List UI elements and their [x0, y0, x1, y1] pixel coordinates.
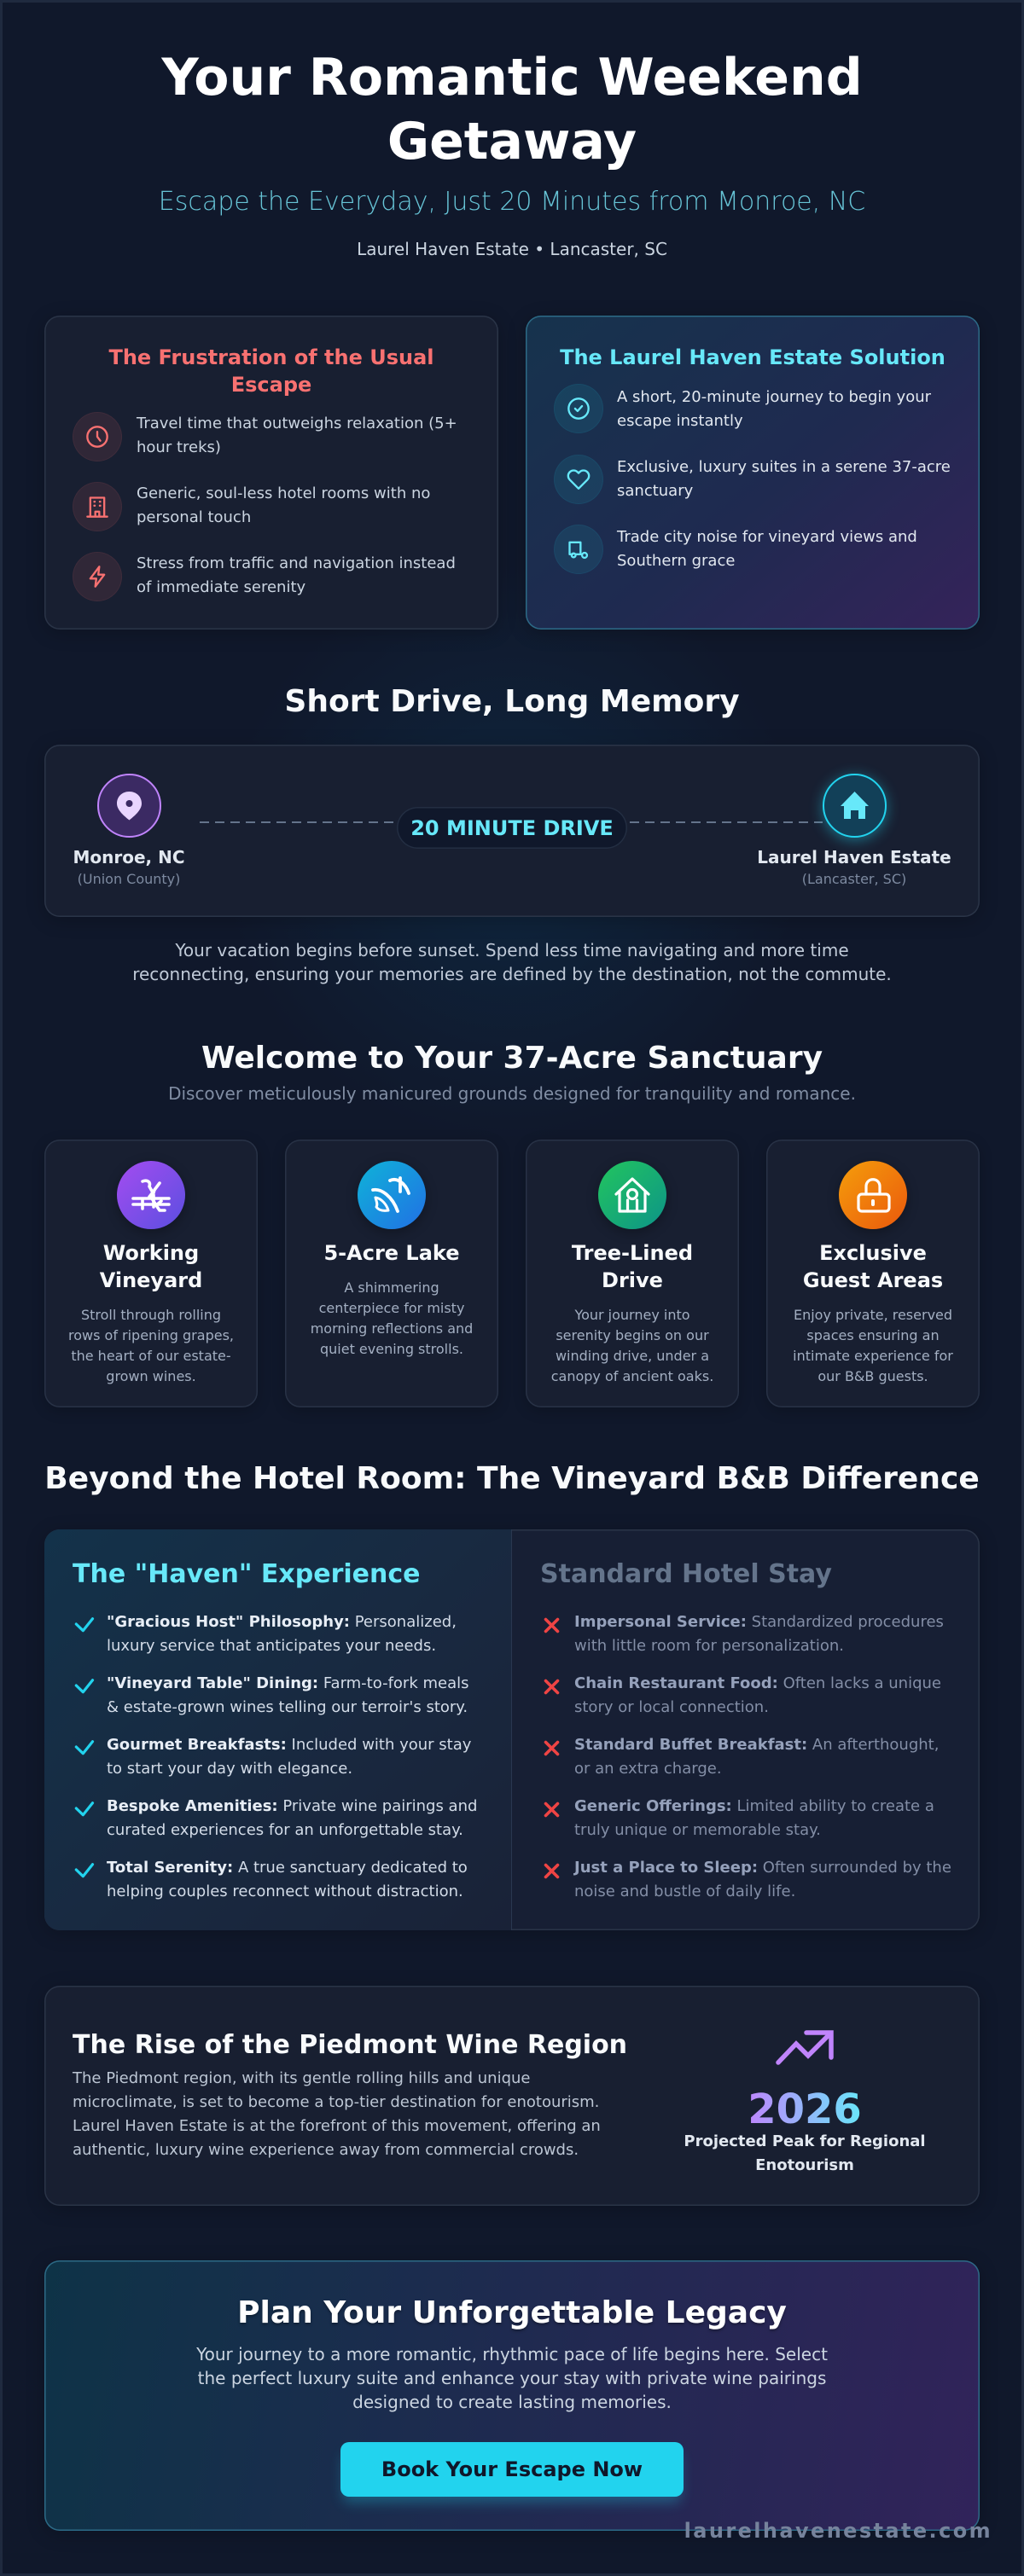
badge: 20 minute drive: 20 MINUTE DRIVE [410, 816, 614, 840]
icon: lock [839, 1161, 907, 1229]
icon: cart [554, 525, 603, 574]
item text [137, 554, 456, 596]
item text [137, 484, 430, 526]
drive description [132, 940, 892, 984]
icon: water [358, 1161, 426, 1229]
button: book your escape [340, 2442, 684, 2497]
cta body text: designed to create lasting memories. [352, 2392, 672, 2412]
origin node [73, 774, 185, 887]
cta body text [196, 2344, 828, 2412]
card description: A shimmering [344, 1279, 439, 1295]
stat label: Projected Peak for Regional [684, 2132, 926, 2150]
card title [99, 1241, 202, 1292]
title [160, 48, 863, 171]
haven column background [44, 1529, 512, 1930]
website watermark: laurelhavenestate.com [684, 2519, 992, 2543]
stat label: Enotourism [755, 2156, 854, 2174]
button: book your escape: Book Your Escape Now [381, 2457, 643, 2481]
item text: of immediate serenity [137, 578, 305, 596]
item text: escape instantly [617, 412, 743, 430]
drive description: Your vacation begins before sunset. Spend less time navigating and more time [175, 940, 849, 960]
card description [311, 1279, 473, 1356]
subtitle: Escape the Everyday, Just 20 Minutes from Monroe, NC [159, 187, 865, 217]
haven item: to start your day with elegance. [107, 1760, 352, 1778]
panel heading: The Frustration of the Usual [108, 345, 434, 369]
card description: spaces ensuring an [806, 1327, 940, 1343]
haven item: "Gracious Host" Philosophy: Personalized, [107, 1613, 457, 1631]
hotel item: with little room for personalization. [574, 1637, 844, 1655]
panel body text: microclimate, is set to become a top-tier destination for enotourism. [73, 2093, 599, 2111]
hotel item [574, 1674, 941, 1716]
location line: Laurel Haven Estate • Lancaster, SC [357, 239, 667, 259]
icon: heart [554, 455, 603, 504]
haven checkmarks [75, 1617, 94, 1878]
hotel item: Generic Offerings: Limited ability to create a [574, 1797, 934, 1815]
icon: map pin [97, 774, 161, 838]
stat label [684, 2132, 926, 2174]
panel heading: The Rise of the Piedmont Wine Region [73, 2030, 627, 2059]
item text: Generic, soul-less hotel rooms with no [137, 484, 430, 502]
panel body text [72, 2069, 601, 2159]
section subtitle: Discover meticulously manicured grounds designed for tranquility and romance. [168, 1083, 856, 1104]
hotel item: Standard Buffet Breakfast: An afterthought, [574, 1736, 939, 1754]
hotel crosses [544, 1617, 560, 1878]
panel body text: authentic, luxury wine experience away from commercial crowds. [73, 2141, 579, 2159]
haven item: Bespoke Amenities: Private wine pairings and [107, 1797, 477, 1815]
panel: call to action [44, 2260, 980, 2531]
hotel item [574, 1736, 939, 1778]
item text: hour treks) [137, 438, 221, 456]
card description: centerpiece for misty [319, 1300, 464, 1315]
haven item: Total Serenity: A true sanctuary dedicated to [107, 1859, 468, 1877]
haven item [107, 1736, 471, 1778]
destination name: Laurel Haven Estate [757, 847, 951, 867]
card: tree-lined drive [526, 1140, 739, 1407]
dashed route line [200, 821, 823, 823]
card: exclusive guest areas [766, 1140, 980, 1407]
haven item [107, 1859, 468, 1900]
card description [551, 1307, 713, 1384]
panel: the frustration [44, 316, 498, 629]
panel heading: The Laurel Haven Estate Solution [560, 345, 945, 369]
section heading: short drive: Short Drive, Long Memory [284, 684, 740, 719]
card title: Drive [602, 1268, 663, 1292]
icon: lightning bolt [73, 552, 122, 601]
badge: 20 minute drive [397, 807, 627, 849]
drive description: reconnecting, ensuring your memories are defined by the destination, not the commute. [132, 964, 892, 984]
haven item: "Vineyard Table" Dining: Farm-to-fork meals [107, 1674, 469, 1692]
card description: our B&B guests. [817, 1368, 928, 1384]
origin county: (Union County) [78, 871, 180, 887]
hotel item: noise and bustle of daily life. [574, 1883, 795, 1900]
item text: Stress from traffic and navigation instead [137, 554, 456, 572]
card description: Enjoy private, reserved [794, 1307, 952, 1322]
panel body text: Laurel Haven Estate is at the forefront of this movement, offering an [73, 2117, 601, 2135]
card title: 5-Acre Lake [323, 1241, 459, 1265]
item text [616, 528, 917, 570]
icon: building [73, 482, 122, 531]
cta body text: the perfect luxury suite and enhance your stay with private wine pairings [198, 2368, 826, 2388]
hotel item: Just a Place to Sleep: Often surrounded by the [574, 1859, 951, 1877]
card title: Guest Areas [803, 1268, 943, 1292]
hotel item [573, 1859, 951, 1900]
haven item: helping couples reconnect without distraction. [107, 1883, 463, 1900]
card description: intimate experience for [793, 1348, 953, 1363]
item text: Trade city noise for vineyard views and [617, 528, 917, 546]
hotel item: or an extra charge. [574, 1760, 722, 1778]
panel: the solution [526, 316, 980, 629]
hotel item [574, 1797, 934, 1839]
item text [617, 458, 951, 500]
hotel item: truly unique or memorable stay. [574, 1821, 821, 1839]
card description: quiet evening strolls. [320, 1341, 463, 1356]
panel body text: The Piedmont region, with its gentle rolling hills and unique [73, 2069, 531, 2087]
haven heading: The "Haven" Experience [73, 1559, 421, 1589]
destination state: (Lancaster, SC) [802, 871, 906, 887]
title: Your Romantic Weekend [161, 48, 863, 107]
hotel item: story or local connection. [574, 1698, 769, 1716]
card title: Working [103, 1241, 199, 1265]
icon: vine [117, 1161, 185, 1229]
card description: serenity begins on our [556, 1327, 709, 1343]
card description: grown wines. [106, 1368, 196, 1384]
icon: clock [73, 412, 122, 461]
item text [137, 415, 457, 456]
hotel item: Impersonal Service: Standardized procedures [574, 1613, 944, 1631]
card description: rows of ripening grapes, [68, 1327, 234, 1343]
card title: Exclusive [819, 1241, 927, 1265]
icon: trending up arrow [776, 2030, 834, 2065]
card description: the heart of our estate- [71, 1348, 231, 1363]
section heading: sanctuary: Welcome to Your 37-Acre Sanctuary [201, 1041, 823, 1076]
icon: check circle [554, 384, 603, 433]
item text: A short, 20-minute journey to begin your [617, 388, 931, 406]
cta heading: Plan Your Unforgettable Legacy [237, 2295, 787, 2330]
card description [793, 1307, 953, 1384]
card title: Tree-Lined [572, 1241, 693, 1265]
origin name: Monroe, NC [73, 847, 185, 867]
panel heading [108, 345, 434, 397]
item text: personal touch [137, 508, 251, 526]
card: 5-acre lake [285, 1140, 498, 1407]
panel: piedmont wine region [44, 1986, 980, 2206]
haven item [107, 1613, 457, 1655]
item text [617, 388, 932, 430]
cta body text: Your journey to a more romantic, rhythmic pace of life begins here. Select [196, 2344, 828, 2364]
haven item [107, 1674, 469, 1716]
card description: Your journey into [574, 1307, 690, 1322]
stat: 2026: 2026 [748, 2086, 862, 2133]
card description: Stroll through rolling [81, 1307, 221, 1322]
destination node [757, 769, 951, 887]
panel: comparison [44, 1529, 980, 1930]
haven item: curated experiences for an unforgettable stay. [107, 1821, 463, 1839]
card description: winding drive, under a [556, 1348, 709, 1363]
item text: Travel time that outweighs relaxation (5+ [137, 415, 457, 432]
haven item: & estate-grown wines telling our terroir's story. [107, 1698, 468, 1716]
card title [572, 1241, 693, 1292]
icon: house [598, 1161, 666, 1229]
item text: sanctuary [617, 482, 693, 500]
icon: home [815, 769, 894, 848]
haven item [107, 1797, 477, 1839]
item text: Southern grace [617, 552, 735, 570]
card title: Vineyard [100, 1268, 202, 1292]
hotel heading: Standard Hotel Stay [540, 1559, 832, 1589]
panel heading: Escape [231, 373, 311, 397]
haven item: luxury service that anticipates your needs. [107, 1637, 436, 1655]
item text: Exclusive, luxury suites in a serene 37-acre [617, 458, 951, 476]
card description [68, 1307, 234, 1384]
card description: canopy of ancient oaks. [551, 1368, 713, 1384]
card description: morning reflections and [311, 1320, 473, 1336]
panel: drive route [44, 745, 980, 917]
title: Getaway [387, 111, 637, 171]
section heading: difference: Beyond the Hotel Room: The Vineyard B&B Difference [44, 1461, 980, 1496]
card title [803, 1241, 943, 1292]
hotel item: Chain Restaurant Food: Often lacks a unique [574, 1674, 941, 1692]
card: working vineyard [44, 1140, 258, 1407]
haven item: Gourmet Breakfasts: Included with your stay [107, 1736, 471, 1754]
hotel item [574, 1613, 944, 1655]
